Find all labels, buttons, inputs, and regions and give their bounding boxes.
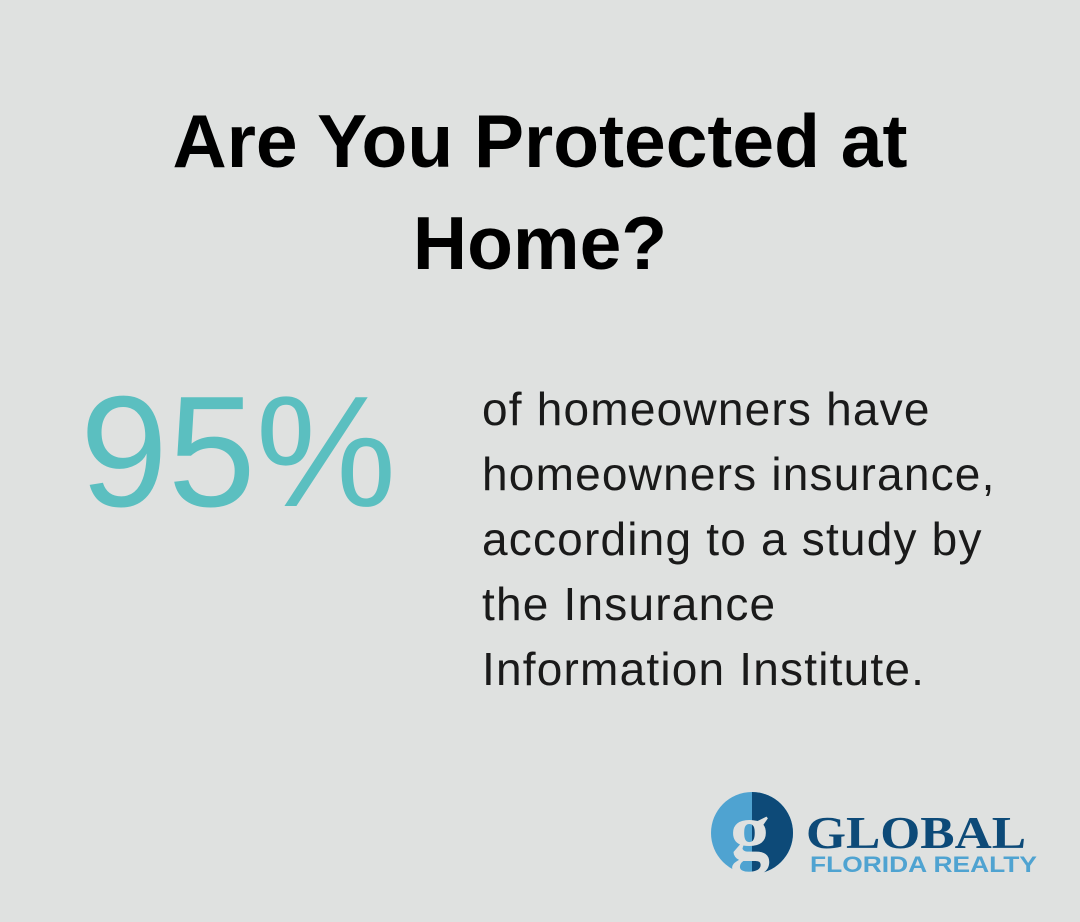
stat description [482,383,996,695]
logo [711,790,1037,877]
stat description: homeowners insurance, [482,448,996,500]
title: Home? [413,201,667,285]
icon: g circle: g [730,790,770,876]
logo wordmark: FLORIDA REALTY [810,852,1037,877]
title: Are You Protected at [173,99,907,183]
title [173,99,907,285]
stat number: 95% [80,364,396,540]
stat description: Information Institute. [482,643,925,695]
logo wordmark [806,807,1037,877]
logo wordmark: GLOBAL [806,807,1026,858]
icon: g circle [711,788,793,876]
stat description: of homeowners have [482,383,931,435]
stat description: the Insurance [482,578,776,630]
stat description: according to a study by [482,513,983,565]
